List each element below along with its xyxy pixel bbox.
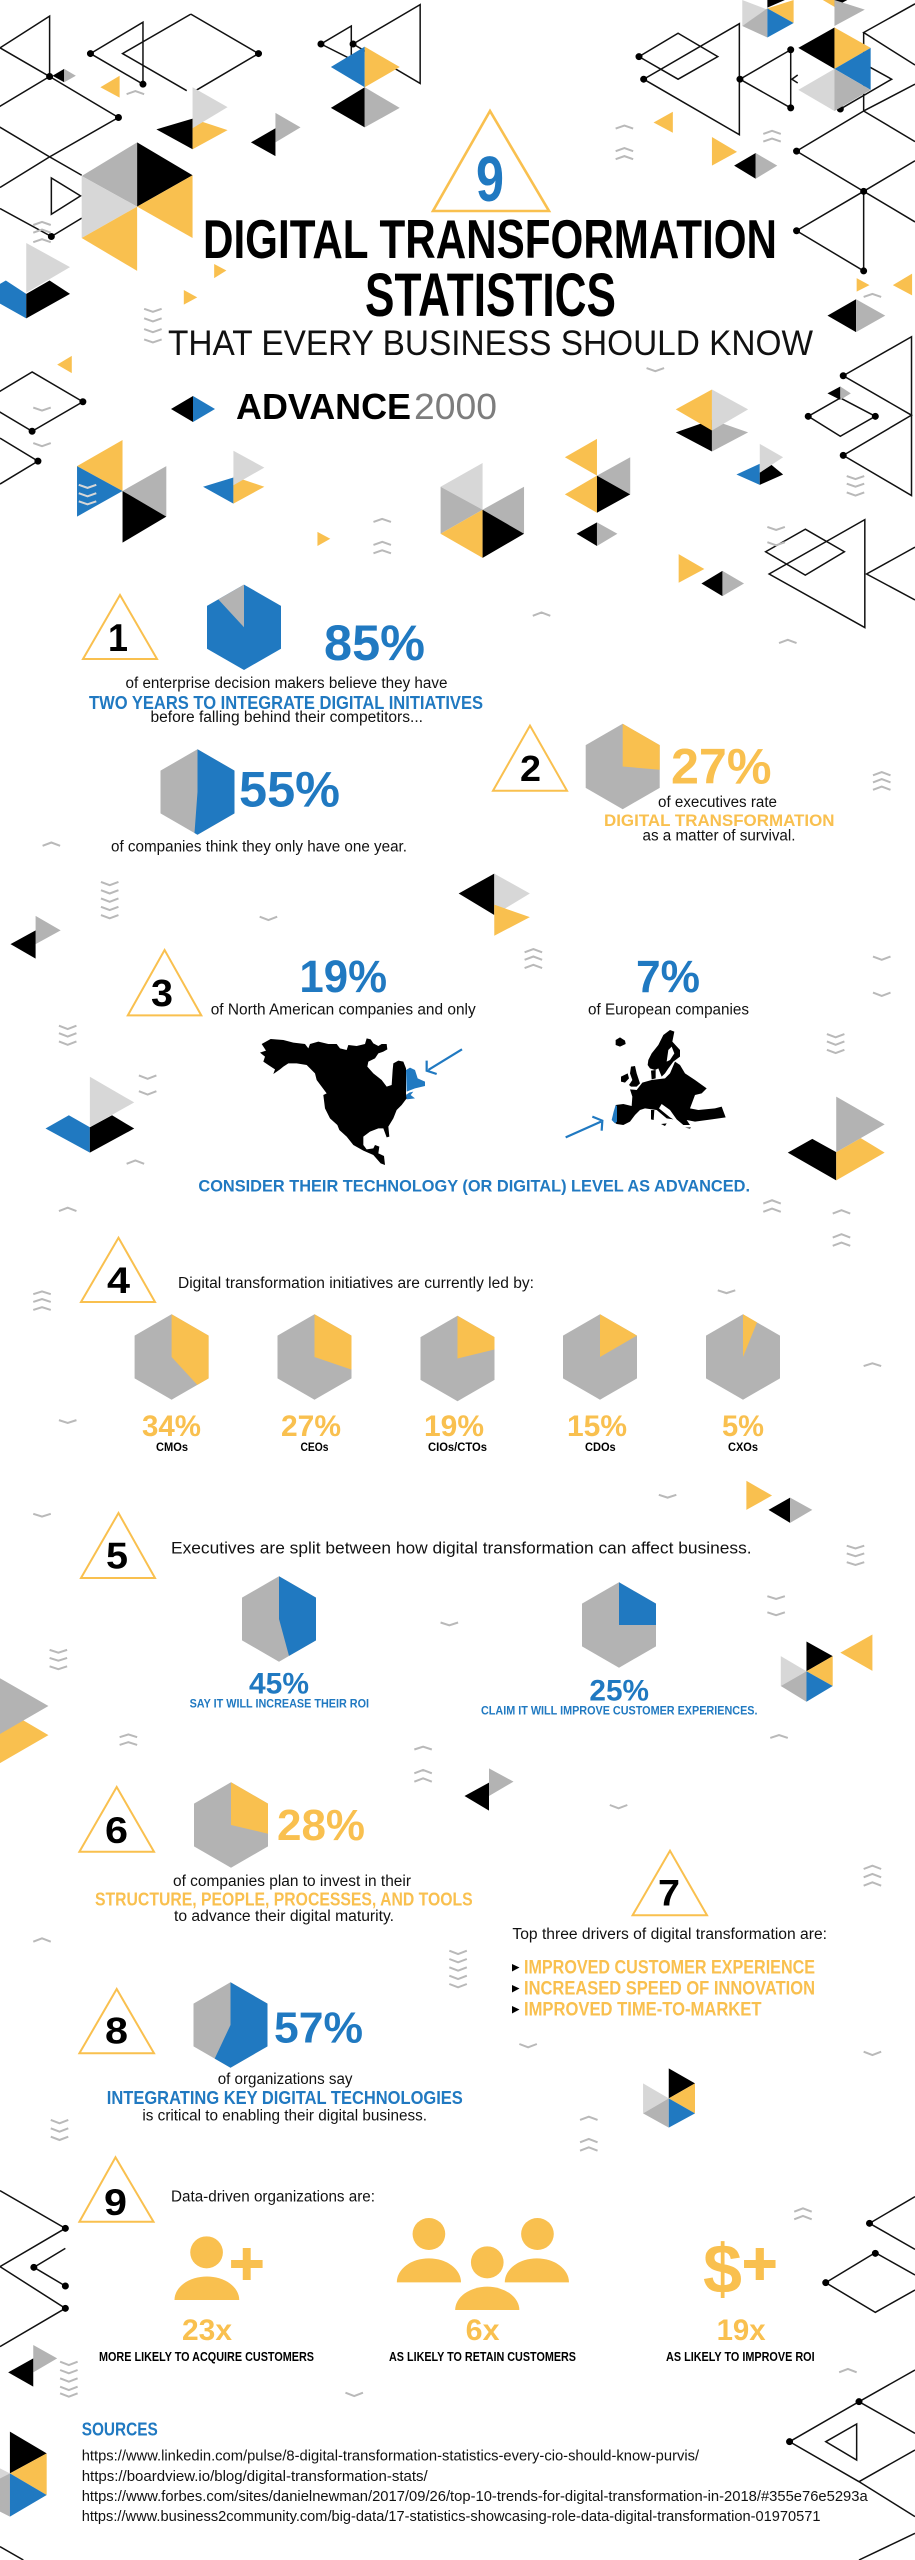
stat: 85%: 85%	[324, 615, 425, 671]
stats: percentages: 19%	[424, 1410, 484, 1443]
chart: 15 percent CDOs	[563, 1314, 637, 1400]
panel: statistic 5	[81, 1513, 758, 1717]
badge: 1	[83, 595, 157, 660]
text: matter of survival: DIGITAL TRANSFORMATION	[604, 811, 834, 830]
icon: right edge triangles and diamond	[827, 274, 912, 400]
icon: blue yellow black grey diamonds	[331, 47, 400, 127]
stat: 45%: 45%	[249, 1668, 309, 1701]
chart: 27 percent hexagon	[586, 724, 660, 809]
panel: statistic 4	[81, 1238, 780, 1454]
text: plan to invest: of companies plan to invest in their	[173, 1873, 411, 1890]
icon: small blue cluster right	[736, 444, 783, 485]
labels: roles: CIOs/CTOs	[428, 1440, 487, 1454]
icon: grey black triangles	[465, 1768, 514, 1811]
stats: multipliers: 19x	[717, 2314, 766, 2347]
chart: 25 percent hexagon	[582, 1582, 656, 1668]
badge: 9: 9	[104, 2182, 127, 2223]
badge: 4	[81, 1238, 155, 1302]
panel: statistic 6	[79, 1782, 473, 1925]
decorative art beside sections 1-3	[11, 612, 890, 1246]
icon: dollar plus: $	[703, 2230, 742, 2308]
subheading: THAT EVERY BUSINESS SHOULD KNOW	[168, 324, 813, 363]
icon: top right cluster	[742, 0, 865, 37]
stat: 7%: 7%	[636, 951, 700, 1002]
icon: yellow triangles and diamond right of title	[654, 112, 777, 179]
stats: percentages: 27%	[281, 1410, 341, 1443]
stats: percentages	[142, 1410, 764, 1443]
icon: lower triangles	[317, 532, 744, 596]
stat: 57%: 57%	[274, 2003, 363, 2052]
list: three drivers: IMPROVED CUSTOMER EXPERIENCE	[524, 1957, 815, 1978]
text: one year: of companies think they only have one year.	[111, 839, 407, 856]
icon: person plus	[174, 2236, 263, 2300]
icon: lower left cluster	[77, 440, 166, 543]
labels: roles	[156, 1440, 758, 1454]
icon: stacked diamonds right	[676, 390, 748, 452]
list: source urls: https://boardview.io/blog/digital-transformation-stats/	[82, 2468, 429, 2485]
labels: multipliers: AS LIKELY TO RETAIN CUSTOMERS	[389, 2349, 576, 2364]
text: integrating technologies: of organizations say	[218, 2071, 353, 2088]
badge: 7: 7	[658, 1873, 680, 1914]
panel: statistic 9	[79, 2157, 815, 2364]
icon: central hexagon cluster	[441, 463, 524, 558]
icon: black light yellow cluster	[459, 874, 530, 936]
text: european companies: of European companies	[588, 1002, 749, 1019]
icon: yellow triangle and diamond	[746, 1481, 812, 1523]
text: matter of survival: of executives rate	[658, 794, 777, 811]
text: enterprise decision makers	[89, 675, 483, 726]
chart: 34 percent CMOs	[135, 1314, 209, 1400]
text: matter of survival	[604, 794, 834, 844]
icon: group of people	[397, 2218, 569, 2310]
stats: multipliers: 6x	[466, 2314, 500, 2347]
icon: grey black triangles left	[11, 916, 61, 959]
text: top three drivers: Top three drivers of digital transformation are:	[512, 1926, 827, 1943]
icon: cluster below section 7	[643, 2068, 695, 2128]
logo: Advance2000	[171, 386, 497, 427]
list: source urls	[82, 2448, 868, 2525]
text: consider advanced: CONSIDER THEIR TECHNOLOGY (OR DIGITAL) LEVEL AS ADVANCED.	[198, 1177, 750, 1196]
logo: Advance2000: ADVANCE	[236, 386, 411, 427]
badge: 7	[633, 1851, 707, 1915]
icon: small yellow triangles	[57, 264, 226, 373]
text: data driven: Data-driven organizations are:	[171, 2189, 375, 2206]
text: north american companies: of North American companies and only	[211, 1002, 476, 1019]
badge: 9 triangle: 9	[476, 143, 504, 215]
labels: multipliers: MORE LIKELY TO ACQUIRE CUSTOMERS	[99, 2349, 314, 2364]
badge: 9	[79, 2157, 154, 2223]
stats: percentages: 15%	[567, 1410, 627, 1443]
panel: sources	[82, 2420, 868, 2525]
icon: grey black triangles	[8, 2345, 57, 2387]
text: enterprise decision makers: TWO YEARS TO INTEGRATE DIGITAL INITIATIVES	[89, 693, 483, 713]
icon: yellow grey cluster	[565, 439, 630, 546]
decorative art beside sections 6-8	[33, 1768, 881, 2151]
badge: 3: 3	[151, 973, 173, 1015]
icon: yellow triangle	[100, 76, 120, 98]
icon: blue yellow cluster	[203, 451, 264, 504]
stat: 28%: 28%	[277, 1801, 365, 1850]
text: plan to invest: to advance their digital maturity.	[174, 1908, 394, 1925]
icon: left cluster section 3	[46, 1077, 134, 1153]
stat: 19%: 19%	[299, 951, 387, 1002]
icon: right cluster section 3	[788, 1097, 885, 1180]
icon: large top right cluster	[798, 28, 871, 111]
labels: roles: CMOs	[156, 1440, 188, 1454]
title block	[168, 111, 813, 363]
list: three drivers	[512, 1957, 815, 2020]
badge: 3	[128, 950, 201, 1015]
panel: statistic 1	[83, 585, 483, 856]
labels: roles: CEOs	[300, 1440, 329, 1454]
badge: 2: 2	[520, 748, 541, 789]
labels: multipliers: AS LIKELY TO IMPROVE ROI	[666, 2349, 815, 2364]
panel: statistic 8	[79, 1982, 463, 2125]
text: integrating technologies: is critical to enabling their digital business.	[142, 2108, 427, 2125]
badge: 6: 6	[105, 1810, 128, 1851]
text: integrating technologies	[107, 2071, 463, 2125]
label: customer experiences: CLAIM IT WILL IMPROVE CUSTOMER EXPERIENCES.	[481, 1703, 758, 1717]
label: increase ROI: SAY IT WILL INCREASE THEIR ROI	[190, 1697, 369, 1711]
list: source urls: https://www.linkedin.com/pulse/8-digital-transformation-statistics-every-cio-should-know-purvis/	[82, 2448, 700, 2465]
labels: roles: CDOs	[585, 1440, 616, 1454]
panel: statistic 3	[128, 950, 750, 1196]
badge: 6	[79, 1787, 154, 1852]
map: North America	[260, 1038, 462, 1165]
chart: 27 percent CEOs	[278, 1314, 352, 1400]
badge: 8	[79, 1989, 154, 2053]
stat: 55%: 55%	[239, 762, 340, 818]
icon: small black and grey diamond	[53, 69, 76, 82]
chart: 28 percent hexagon	[194, 1782, 268, 1868]
chart: 55 percent hexagon	[160, 749, 234, 835]
heading: sources: SOURCES	[82, 2420, 158, 2440]
decorative geometric header art	[0, 0, 915, 628]
chart: 85 percent hexagon	[207, 585, 281, 670]
chart: 57 percent hexagon	[194, 1982, 268, 2068]
stat: 27%: 27%	[671, 739, 772, 795]
list: source urls: https://www.forbes.com/sites/danielnewman/2017/09/26/top-10-trends-for-digital-transformation-in-2018/#355e76e5293a	[82, 2488, 868, 2505]
badge: 8: 8	[105, 2010, 128, 2051]
icon: dollar plus	[703, 2230, 776, 2308]
list: three drivers: IMPROVED TIME-TO-MARKET	[524, 1999, 762, 2020]
panel: statistic 7	[512, 1851, 827, 2020]
icon: large hexagon cluster	[82, 142, 193, 271]
stats: percentages: 34%	[142, 1410, 201, 1443]
badge: 1: 1	[108, 617, 128, 660]
logo: Advance2000: 2000	[414, 386, 497, 427]
stats: multipliers	[182, 2314, 766, 2347]
badge: 5	[81, 1513, 155, 1578]
heading: statistics: STATISTICS	[365, 261, 616, 329]
stats: multipliers: 23x	[182, 2314, 232, 2347]
badge: 2	[493, 726, 567, 791]
text: plan to invest: STRUCTURE, PEOPLE, PROCESSES, AND TOOLS	[95, 1890, 473, 1910]
text: integrating technologies: INTEGRATING KEY DIGITAL TECHNOLOGIES	[107, 2088, 463, 2108]
chart: 5 percent CXOs	[706, 1314, 780, 1400]
icon: cluster left of sources	[0, 2432, 47, 2517]
text: plan to invest	[95, 1873, 473, 1925]
text: executives split: Executives are split between how digital transformation can affect business.	[171, 1538, 752, 1557]
badge: 9 triangle	[433, 111, 549, 215]
stat: 25%: 25%	[589, 1675, 649, 1708]
map: Europe	[566, 1030, 726, 1137]
labels: roles: CXOs	[728, 1440, 758, 1454]
text: matter of survival: as a matter of survival.	[642, 828, 796, 844]
icon: geometric cluster top left	[156, 87, 228, 149]
text: enterprise decision makers: before falling behind their competitors...	[150, 709, 423, 726]
text: initiatives led by: Digital transformation initiatives are currently led by:	[178, 1275, 534, 1292]
list: three drivers: INCREASED SPEED OF INNOVATION	[524, 1978, 815, 1999]
chart: 19 percent CIOs	[420, 1316, 494, 1401]
panel: statistic 2	[493, 724, 834, 844]
list: source urls: https://www.business2community.com/big-data/17-statistics-showcasing-role-data-digital-transformation-01970571	[82, 2508, 820, 2525]
labels: multipliers	[99, 2349, 815, 2364]
badge: 5: 5	[106, 1536, 128, 1576]
decorative art around section 9 and sources	[0, 2191, 915, 2560]
badge: 4: 4	[107, 1260, 130, 1301]
icon: grey and black triangles	[251, 113, 301, 156]
decorative art beside sections 4-5	[0, 1290, 881, 1763]
text: enterprise decision makers: of enterprise decision makers believe they have	[126, 675, 448, 692]
stats: percentages: 5%	[722, 1410, 764, 1443]
icon: right cluster section 5	[781, 1634, 872, 1702]
icon: left edge cluster	[0, 243, 70, 318]
icon: left edge grey yellow	[0, 1678, 48, 1763]
chart: 45 percent hexagon	[242, 1576, 316, 1662]
